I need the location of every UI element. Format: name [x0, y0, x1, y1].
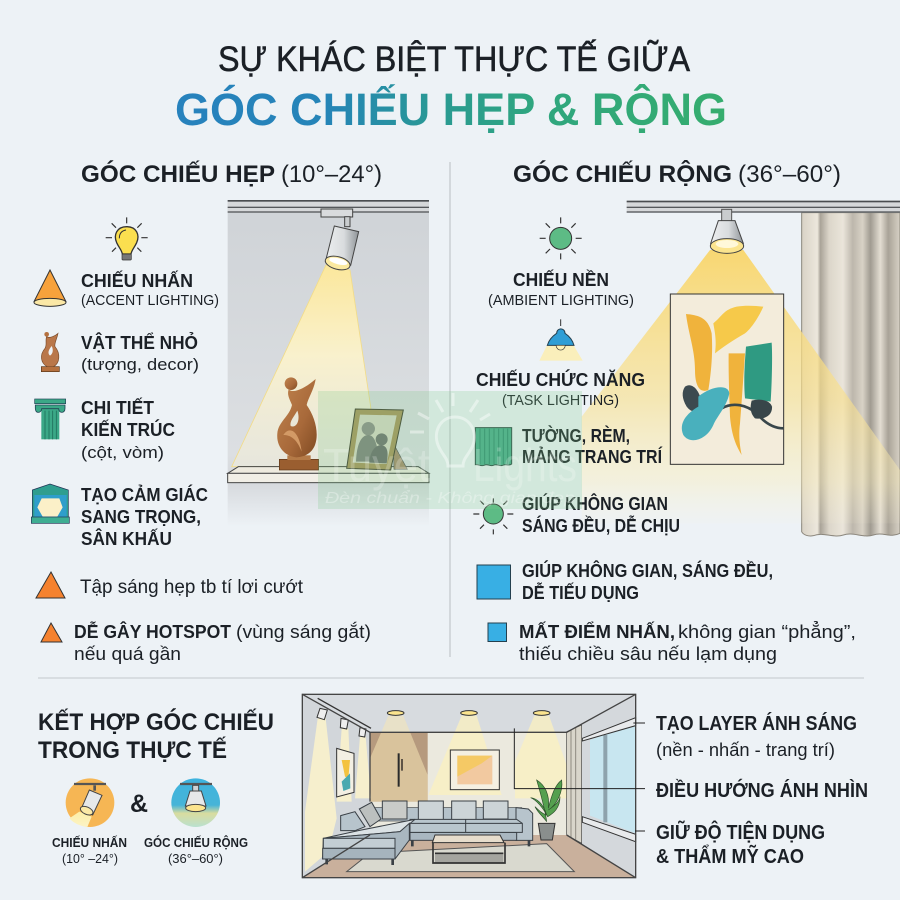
wood wall panel	[370, 732, 428, 802]
text: layered light: TẠO LAYER ÁNH SÁNG	[656, 712, 857, 735]
text: accent lighting	[81, 270, 219, 309]
text: guiding the eye: ĐIỀU HƯỚNG ÁNH NHÌN	[656, 778, 868, 802]
icon: green sun	[540, 217, 582, 259]
text: small objects: VẬT THỂ NHỎ	[81, 332, 198, 353]
text: comfortable use: DỄ TIẾU DỤNG	[522, 582, 639, 603]
icon: small green sun	[473, 498, 513, 534]
icon: small orange triangle	[41, 623, 62, 642]
text: layered light	[656, 712, 857, 760]
watermark	[318, 391, 582, 509]
sconce	[398, 753, 403, 787]
heading: narrow beam: GÓC CHIẾU HẸP	[81, 160, 275, 188]
leader lines	[514, 723, 645, 831]
watermark: Tuyệt	[323, 439, 430, 491]
text: even lighting: GIÚP KHÔNG GIAN	[522, 493, 668, 514]
text: ambient lighting: (AMBIENT LIGHTING)	[488, 292, 634, 309]
text: walls and curtains: TƯỜNG, RÈM,	[522, 425, 630, 446]
text: luxury stage feel: SÂN KHẤU	[81, 528, 172, 549]
label: wide badge: GÓC CHIẾU RỘNG	[144, 835, 248, 850]
text: walls and curtains: MẢNG TRANG TRÍ	[522, 446, 663, 467]
icon: light bulb	[106, 217, 148, 260]
label: accent badge	[52, 835, 127, 866]
text: even lighting	[522, 493, 680, 536]
text: layered light: (nền - nhấn - trang trí)	[656, 740, 835, 760]
text: narrow focus: Tập sáng hẹp tb tí lơi cướt	[80, 577, 304, 598]
title: GÓC CHIẾU HẸP & RỘNG	[175, 84, 727, 135]
rug	[347, 844, 574, 872]
text: ambient lighting	[488, 269, 634, 309]
icon: blue square	[477, 565, 510, 599]
text: small objects: (tượng, decor)	[81, 355, 199, 374]
heading: combining beam angles: KẾT HỢP GÓC CHIẾU	[38, 708, 274, 736]
illustration: wide floodlight with painting and curtain	[582, 201, 900, 536]
text: task lighting	[476, 369, 645, 409]
spotlight	[324, 226, 359, 272]
photo frame	[347, 409, 407, 470]
text: hotspot warning: (vùng sáng gắt)	[236, 621, 371, 642]
text: flat space warning	[519, 621, 856, 664]
icon: column	[35, 399, 66, 439]
text: flat space warning: không gian “phẳng”,	[678, 621, 856, 642]
light beam wide	[582, 250, 900, 523]
heading: wide beam	[513, 160, 841, 188]
icon: wide lamp badge	[171, 778, 220, 827]
text: architecture: KIẾN TRÚC	[81, 419, 175, 440]
light beam narrow	[232, 265, 377, 467]
text: hotspot warning: nếu quá gần	[74, 644, 181, 664]
icon: orange triangle	[36, 572, 65, 598]
track rail	[228, 200, 429, 227]
label: accent badge: CHIẾU NHẤN	[52, 835, 127, 850]
text: task lighting: CHIẾU CHỨC NĂNG	[476, 369, 645, 390]
text: flat space warning: MẤT ĐIỂM NHẤN,	[519, 621, 675, 642]
left art	[337, 748, 354, 797]
title: SỰ KHÁC BIỆT THỰC TẾ GIỮA	[218, 39, 691, 79]
title	[175, 39, 727, 135]
text: luxury stage feel	[81, 484, 208, 549]
heading: wide beam: (36°–60°)	[738, 161, 841, 188]
text: architecture	[81, 397, 175, 462]
heading: wide beam: GÓC CHIẾU RỘNG	[513, 160, 732, 188]
text: comfortable use: GIÚP KHÔNG GIAN, SÁNG ĐỀU,	[522, 560, 773, 581]
text: architecture: CHI TIẾT	[81, 397, 154, 418]
downlight beams	[305, 716, 567, 872]
label: wide badge	[144, 835, 248, 866]
text: luxury stage feel: TẠO CẢM GIÁC	[81, 484, 208, 505]
ampersand: &	[130, 790, 148, 818]
label: accent badge: (10° –24°)	[62, 852, 118, 866]
sofa	[323, 801, 533, 865]
illustration: living room	[302, 694, 645, 878]
text: ambient lighting: CHIẾU NỀN	[513, 269, 609, 290]
text: usability and aesthetics: & THẨM MỸ CAO	[656, 845, 804, 868]
heading: combining beam angles: TRONG THỰC TẾ	[38, 736, 227, 764]
text: flat space warning: thiếu chiều sâu nếu lạm dụng	[519, 644, 777, 664]
sculpture	[277, 377, 319, 470]
curtain and window	[567, 718, 636, 843]
text: hotspot warning	[74, 621, 371, 664]
text: small objects	[81, 332, 199, 374]
heading: narrow beam: (10°–24°)	[281, 161, 382, 188]
text: hotspot warning: DỄ GÂY HOTSPOT	[74, 621, 231, 642]
text: task lighting: (TASK LIGHTING)	[502, 392, 619, 409]
plant	[531, 780, 562, 840]
watermark: Đèn chuẩn - Không gian đẹp	[325, 489, 575, 507]
text: accent lighting: (ACCENT LIGHTING)	[81, 292, 219, 309]
room outline	[302, 694, 636, 878]
text: walls and curtains	[522, 425, 663, 467]
text: luxury stage feel: SANG TRỌNG,	[81, 507, 201, 527]
icon: narrow spotlight badge	[66, 778, 114, 827]
icon: small blue square	[488, 623, 506, 642]
icon: pendant lamp	[539, 319, 583, 361]
heading: narrow beam	[81, 160, 382, 188]
text: usability and aesthetics: GIỮ ĐỘ TIỆN DỤNG	[656, 820, 825, 844]
icon: small sculpture	[41, 332, 59, 372]
painting	[670, 294, 784, 464]
watermark: Lights	[473, 439, 577, 491]
text: comfortable use	[522, 560, 773, 603]
heading: combining beam angles	[38, 708, 274, 764]
icon: stage	[31, 484, 69, 523]
shelf	[228, 467, 429, 483]
framed picture	[450, 750, 499, 790]
text: accent lighting: CHIẾU NHẤN	[81, 270, 193, 291]
text: architecture: (cột, vòm)	[81, 443, 164, 462]
lamp	[710, 209, 744, 253]
track rail	[627, 201, 900, 213]
coffee table	[432, 835, 505, 863]
ceiling lights	[387, 711, 550, 715]
text: even lighting: SÁNG ĐỀU, DỄ CHỊU	[522, 515, 680, 536]
icon: green curtain swatch	[475, 428, 512, 466]
label: wide badge: (36°–60°)	[168, 852, 223, 866]
curtain	[802, 213, 900, 536]
track spotlights	[317, 698, 371, 737]
illustration: narrow spotlight on shelf	[228, 200, 429, 527]
text: usability and aesthetics	[656, 820, 825, 868]
icon: orange cone	[34, 270, 66, 306]
